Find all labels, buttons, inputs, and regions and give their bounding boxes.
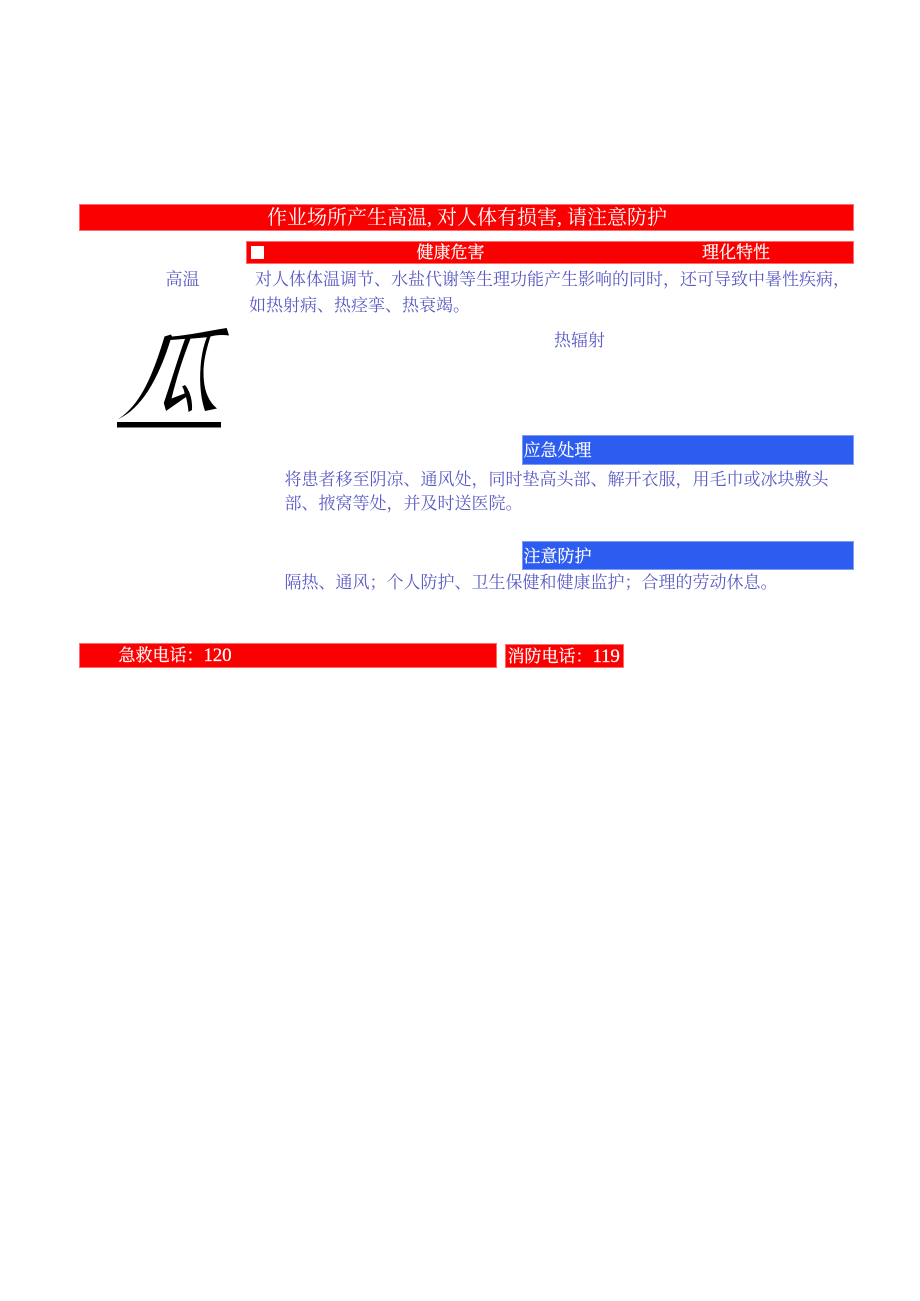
first aid phone text: 急救电话：120 bbox=[118, 645, 231, 666]
emergency treatment text: 将患者移至阴凉、通风处，同时垫高头部、解开衣服，用毛巾或冰块敷头 bbox=[284, 470, 828, 489]
white square marker bbox=[251, 246, 264, 259]
first aid phone bar bbox=[79, 643, 497, 668]
title banner bbox=[79, 204, 854, 231]
health hazard text: 对人体体温调节、水盐代谢等生理功能产生影响的同时，还可导致中暑性疾病， bbox=[255, 270, 850, 289]
title text: 作业场所产生高温,对人体有损害,请注意防护 bbox=[267, 207, 667, 229]
heading text: 应急处理 bbox=[524, 441, 592, 460]
hazard name: 高温 bbox=[166, 270, 200, 289]
health hazard text bbox=[249, 270, 850, 315]
heading text: 注意防护 bbox=[524, 547, 592, 566]
icon: high temperature symbol bbox=[117, 328, 229, 428]
fire phone text: 消防电话：119 bbox=[508, 646, 620, 667]
health hazard text: 如热射病、热痉挛、热衰竭。 bbox=[249, 296, 470, 315]
emergency treatment text: 部、掖窝等处，并及时送医院。 bbox=[284, 494, 522, 513]
hazard type label: 热辐射 bbox=[554, 331, 605, 350]
heading: physicochemical properties: 理化特性 bbox=[702, 243, 770, 262]
precautions text: 隔热、通风；个人防护、卫生保健和健康监护；合理的劳动休息。 bbox=[284, 573, 778, 592]
emergency treatment text bbox=[284, 470, 828, 513]
fire phone bar bbox=[505, 644, 624, 668]
section header bar: health hazards and properties bbox=[246, 241, 854, 264]
heading: health hazards: 健康危害 bbox=[416, 243, 484, 262]
section header: precautions bbox=[522, 541, 854, 570]
section header: emergency treatment bbox=[522, 435, 854, 465]
